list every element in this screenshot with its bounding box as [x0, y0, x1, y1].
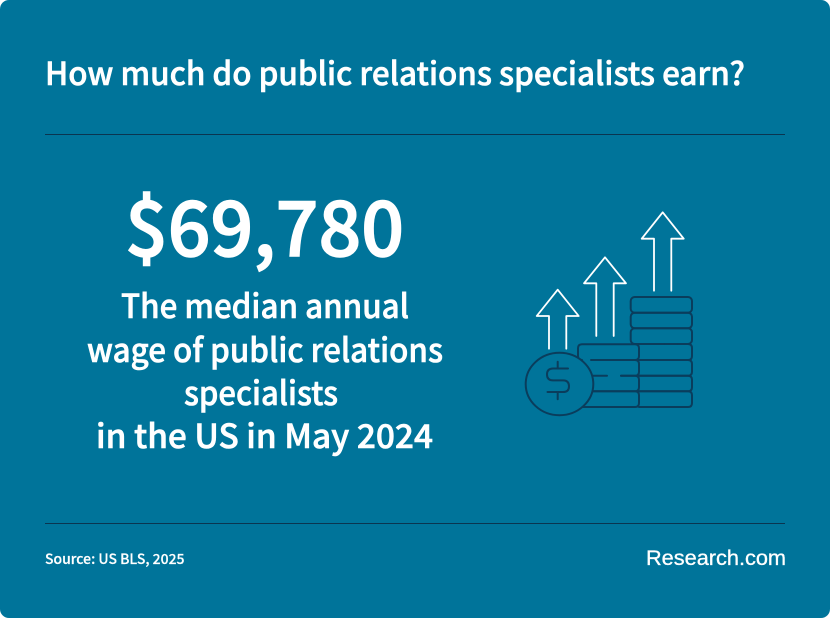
icon: middle coin stack	[578, 344, 639, 407]
description text: wage of public relations	[87, 324, 443, 372]
description text: The median annual	[121, 280, 409, 328]
description text: in the US in May 2024	[96, 410, 433, 458]
icon: dollar coin	[526, 353, 593, 415]
headline figure: median wage: $69,780	[125, 168, 404, 278]
description text: specialists	[184, 367, 338, 415]
icon: right coin stack	[631, 297, 692, 407]
source note: Source: US BLS, 2025	[45, 549, 185, 569]
description text	[87, 280, 443, 458]
logo: Research.com: Research.com	[646, 546, 786, 570]
icon: white arrows	[537, 212, 684, 349]
title: How much do public relations specialists earn?	[45, 49, 745, 95]
icon: coin stacks with rising arrows	[526, 212, 692, 415]
